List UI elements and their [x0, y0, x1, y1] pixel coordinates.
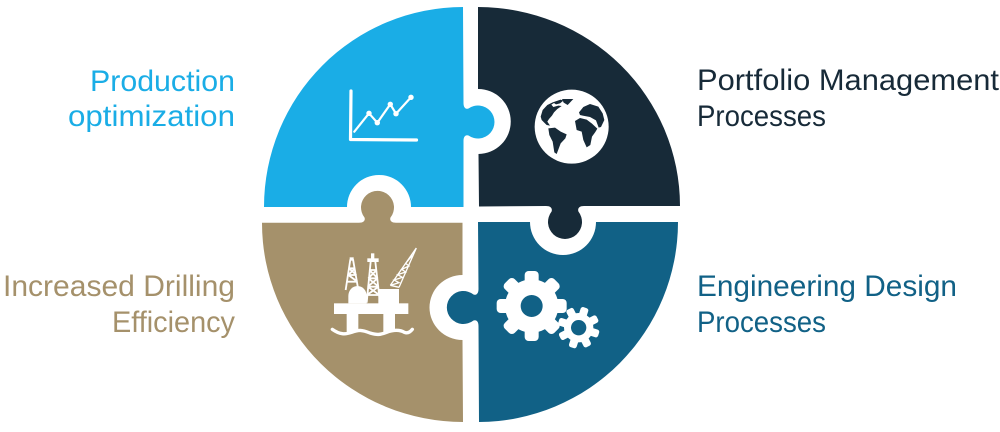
panel: production optimization label: optimization: [68, 100, 235, 133]
puzzle piece: tan: [262, 191, 463, 422]
panel: increased drilling efficiency label: Efficiency: [112, 306, 235, 339]
panel: production optimization label: Production: [90, 65, 235, 98]
panel: engineering design label: Engineering Design: [697, 270, 957, 303]
panel: engineering design label: [697, 270, 957, 339]
icon: offshore oil rig: [332, 248, 416, 334]
panel: portfolio management label: [697, 64, 999, 133]
panel: portfolio management label: Processes: [697, 100, 826, 133]
puzzle piece: blue: [264, 7, 494, 207]
icon: line chart: [350, 91, 416, 140]
icon: globe: [535, 90, 609, 164]
puzzle piece: navy: [478, 7, 680, 239]
panel: increased drilling efficiency label: Increased Drilling: [3, 270, 235, 303]
panel: portfolio management label: Portfolio Management: [697, 64, 999, 97]
icon: gears: [497, 271, 600, 349]
panel: production optimization label: [68, 65, 235, 133]
puzzle piece: teal: [447, 222, 678, 422]
panel: increased drilling efficiency label: [3, 270, 235, 339]
panel: engineering design label: Processes: [697, 306, 826, 339]
